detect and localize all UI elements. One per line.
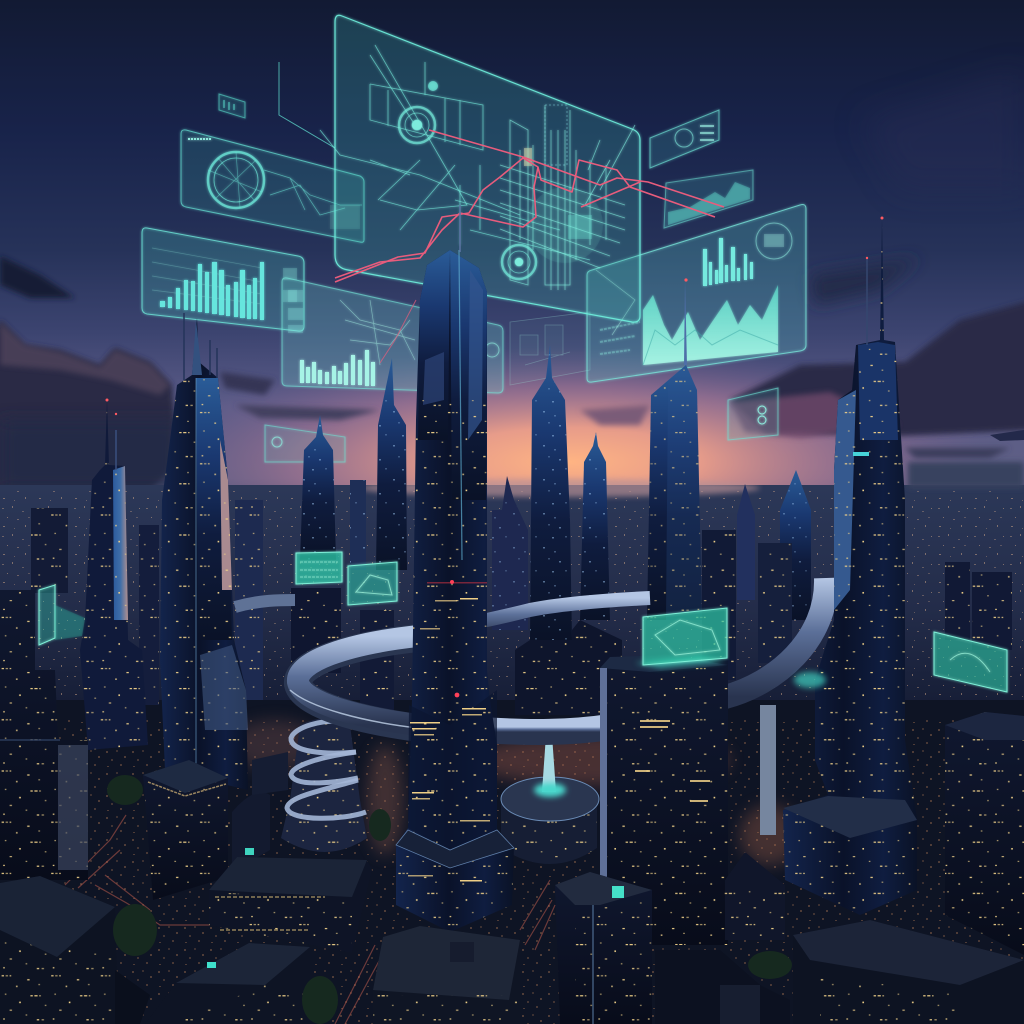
holographic panel: side tag right [650,110,719,168]
hologram sign: middle left [348,562,397,605]
tower: twin spire [580,432,610,620]
tower: slender far centre-left [376,358,407,570]
tower: central-right spire [515,345,622,715]
tower: right main [783,216,917,915]
connector line [279,62,335,148]
tower: small slab [350,480,366,570]
area chart [643,285,778,365]
tower: spiral [281,718,367,852]
building: bottom front tower [555,872,652,1024]
building: front roof block with hologram [600,655,728,945]
tower: block centre-right [702,530,792,680]
map target left [399,107,435,143]
hologram sign: far left [39,585,85,645]
building: bottom centre [373,926,520,1024]
building: left edge stack [0,590,88,880]
clouds [0,70,1024,490]
holographic panel: small tag top left [219,94,245,118]
bars [703,238,753,286]
tower: mid-left block [139,500,263,705]
tower: right-centre glass [647,278,702,620]
holographic panel: faint data block [510,312,590,385]
tower: right cluster [945,562,1012,650]
building: left foreground [143,752,288,900]
bars [160,262,264,320]
building: bottom second left [145,943,310,1024]
tower: mid block behind ring [291,588,394,730]
tower: cylindrical roof disc [501,735,599,864]
hologram sign: tall left [296,552,342,584]
building: low block right of centre [725,852,785,940]
building: low roof centre-left [209,848,372,953]
hologram sign: on front block [643,608,727,665]
plan lines [370,84,483,150]
sky background [0,0,1024,577]
hologram sign: right tower [934,632,1007,692]
red route lines [335,130,724,363]
tower: far left [80,398,148,750]
building: bottom left [0,876,150,1024]
holographic panel: radar map [181,130,364,242]
building: bottom right [793,920,1024,1024]
holographic panel: small tag low left [265,425,345,462]
map target lower [502,245,536,279]
building: bottom centre-right low [655,950,790,1024]
distant city [0,462,1024,735]
holographic panel: lower map and chart [282,278,503,393]
tower: twin left [300,415,336,560]
holographic panel: analytics right [587,204,806,382]
tower: left main [160,313,248,790]
holographic panel: area tag right [664,170,753,228]
tower: central main [396,205,514,932]
elevated ring: back arc [235,598,650,635]
holographic panel: main city map [320,15,640,322]
trees [107,775,792,1024]
holographic panel: bar chart [142,228,304,331]
background towers [31,358,1012,705]
tower: far right spire [737,470,811,620]
tower: distant centre [492,476,528,630]
building: right foreground [945,712,1024,955]
elevated ring: front arc [290,578,826,732]
holographic panel: small tag low right [728,388,778,440]
mid-ground streets [0,700,1024,1024]
tower: block left [31,508,68,593]
window clusters [408,598,490,882]
city grid [500,105,635,290]
ring support pillar [760,705,776,835]
ring glow under track [794,672,826,688]
